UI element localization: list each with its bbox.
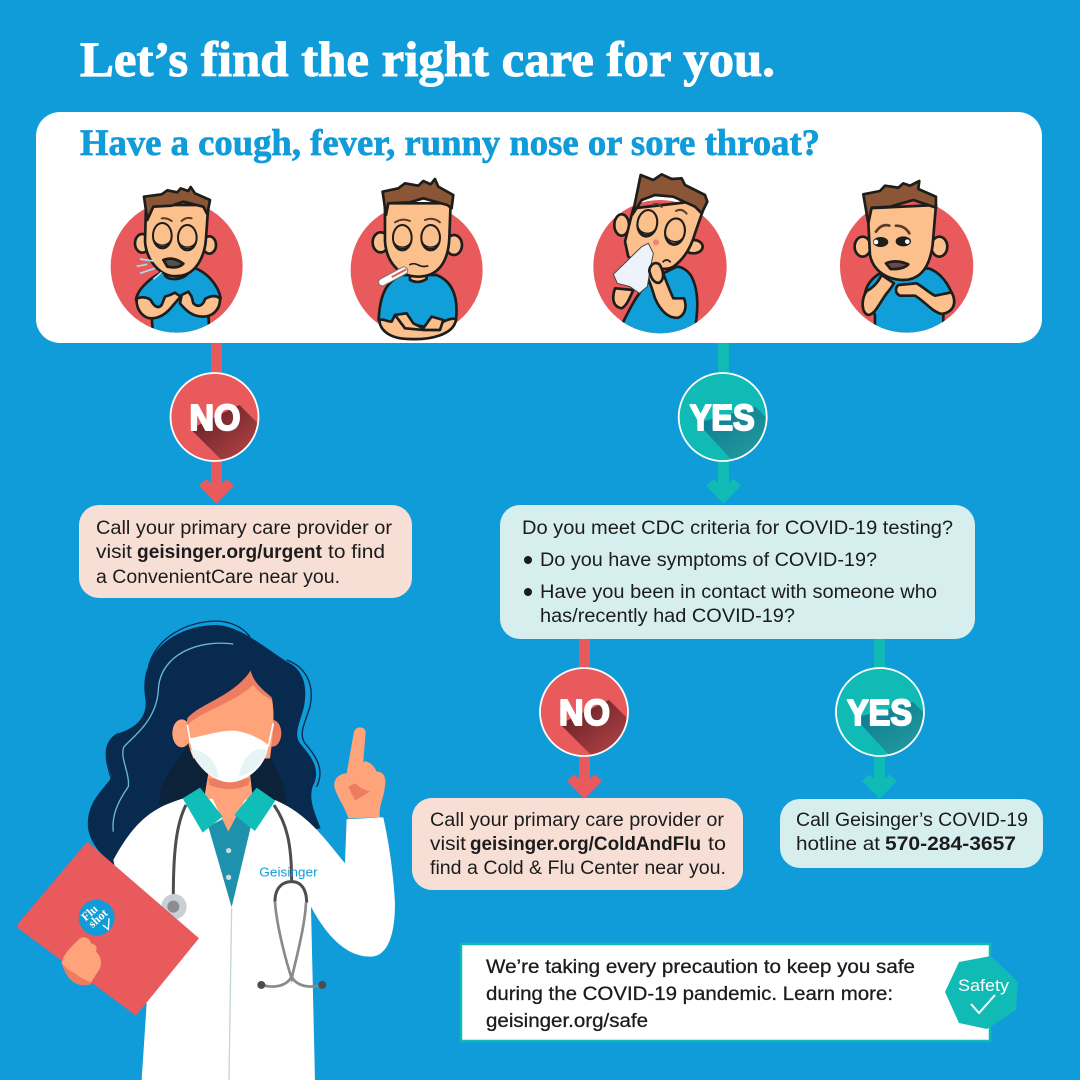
callout: cold and flu center bbox=[412, 798, 743, 890]
callout: COVID hotline: Call Geisinger’s COVID-19 bbox=[796, 810, 1028, 831]
illustration: doctor bbox=[17, 621, 395, 1080]
callout: primary care, urgent: geisinger.org/urgent bbox=[137, 542, 323, 563]
callout: CDC criteria: Do you meet CDC criteria for COVID-19 testing? bbox=[522, 518, 953, 539]
callout: CDC criteria bbox=[500, 505, 975, 639]
panel: safety note: We’re taking every precaution to keep you safe bbox=[486, 956, 915, 978]
callout: primary care, urgent bbox=[79, 505, 412, 598]
callout: cold and flu center: find a Cold & Flu Center near you. bbox=[430, 858, 726, 879]
callout: cold and flu center: to bbox=[708, 834, 726, 855]
flu shot sticker bbox=[78, 900, 115, 936]
callout: primary care, urgent: to find bbox=[328, 542, 385, 563]
badge: NO bbox=[170, 372, 260, 462]
panel: safety note: geisinger.org/safe bbox=[486, 1010, 648, 1032]
badge: YES bbox=[678, 372, 768, 462]
icon: man with sore throat bbox=[840, 181, 973, 338]
callout: CDC criteria: Do you have symptoms of COVID-19? bbox=[540, 550, 877, 571]
callout: CDC criteria: Have you been in contact with someone who bbox=[540, 582, 937, 603]
badge: NO: NO bbox=[190, 397, 240, 438]
badge: second NO bbox=[539, 667, 629, 757]
flu shot sticker: shot bbox=[85, 906, 111, 931]
connector: yes branch bbox=[706, 343, 741, 504]
connector: second no branch bbox=[567, 639, 602, 799]
badge: second NO: NO bbox=[559, 692, 610, 733]
callout: primary care, urgent: Call your primary care provider or bbox=[96, 518, 393, 539]
callout: COVID hotline: hotline at bbox=[796, 834, 881, 855]
coat logo text: Geisinger bbox=[259, 866, 318, 880]
connector: second yes branch bbox=[862, 639, 897, 799]
panel: symptoms bbox=[36, 112, 1042, 343]
callout: cold and flu center: geisinger.org/ColdAndFlu bbox=[470, 834, 701, 855]
badge: second YES: YES bbox=[847, 692, 912, 733]
badge: YES: YES bbox=[690, 397, 755, 438]
icon: safety badge bbox=[945, 956, 1018, 1029]
title: Let’s find the right care for you. bbox=[80, 31, 775, 87]
icon: man blowing nose bbox=[593, 174, 727, 338]
callout: COVID hotline: 570-284-3657 bbox=[885, 834, 1016, 855]
callout: cold and flu center: Call your primary care provider or bbox=[430, 810, 725, 831]
callout: COVID hotline bbox=[780, 799, 1043, 868]
icon: man with thermometer bbox=[351, 179, 483, 339]
callout: cold and flu center: visit bbox=[430, 834, 467, 855]
callout: primary care, urgent: a ConvenientCare near you. bbox=[96, 567, 340, 588]
callout: primary care, urgent: visit bbox=[96, 542, 133, 563]
icon: safety badge: Safety bbox=[958, 976, 1010, 995]
badge: second YES bbox=[835, 667, 925, 757]
flu shot sticker: Flu bbox=[78, 902, 101, 924]
callout: CDC criteria: has/recently had COVID-19? bbox=[540, 606, 795, 627]
panel: safety note: during the COVID-19 pandemic. Learn more: bbox=[486, 983, 893, 1005]
icon: man coughing bbox=[111, 187, 243, 338]
symptoms heading: Have a cough, fever, runny nose or sore throat? bbox=[80, 123, 820, 164]
panel: safety note bbox=[461, 944, 1018, 1041]
connector: no branch bbox=[199, 343, 234, 504]
